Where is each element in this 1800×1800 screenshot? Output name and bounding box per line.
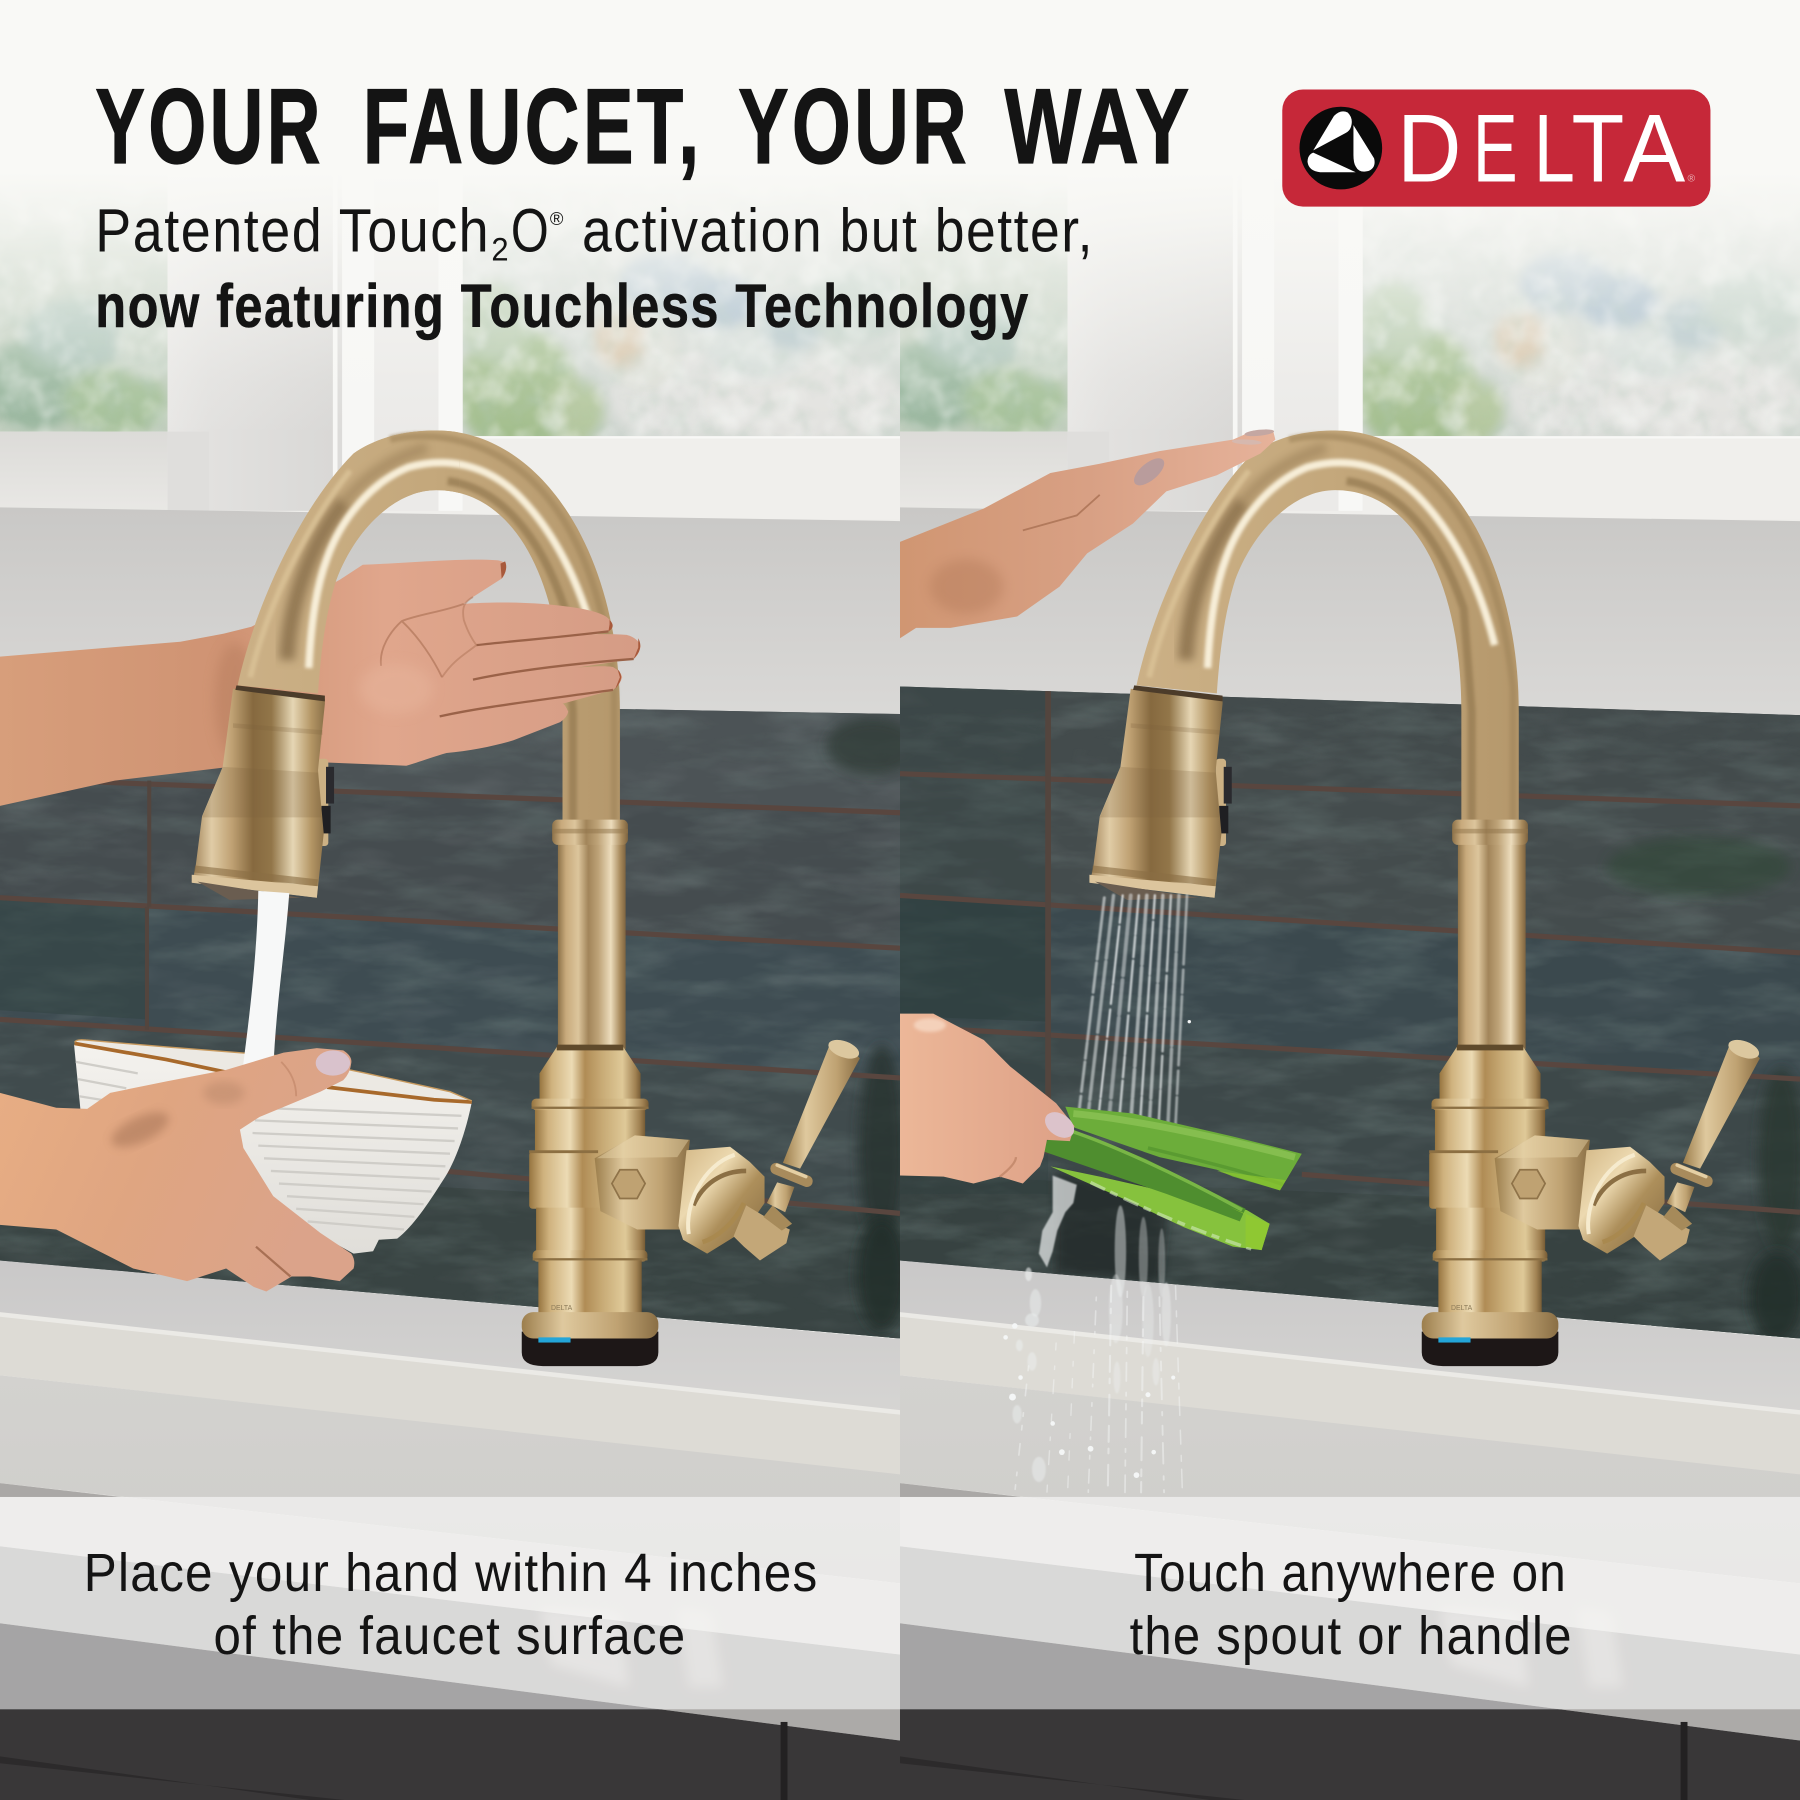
caption right: the spout or handle [1130,1606,1573,1666]
faucet right: DELTA [1451,1305,1473,1312]
subtitle line one: 2 [491,232,509,268]
logo: Delta: A [1623,95,1686,202]
subtitle line one: Patented Touch [95,196,490,264]
subtitle line one: O [511,196,549,264]
title: FAUCET, [363,66,703,186]
title: YOUR [95,66,324,186]
subtitle line one: activation but better, [582,196,1094,264]
tile backsplash left [0,689,918,1355]
faucet left: spout and stem: DELTA [551,1305,573,1312]
caption right: Touch anywhere on [1134,1543,1567,1603]
water spray right [1079,895,1187,1134]
logo: Delta: T [1572,95,1624,202]
background: kitchen room left panel [0,215,900,1800]
water stream left [242,891,289,1072]
hand holding vegetables [900,1014,1079,1184]
faucet left: spout and stem [238,430,862,1366]
title [95,66,1193,186]
caption left [84,1543,818,1666]
caption left: of the faucet surface [214,1606,686,1666]
logo: Delta: E [1473,95,1518,202]
subtitle line two: now featuring Touchless Technology [95,272,1030,340]
caption right [1130,1543,1573,1666]
subtitle line one: ® [550,208,564,229]
title: YOUR [738,66,970,186]
background: kitchen room right panel [900,215,1800,1800]
caption band right [900,1497,1800,1709]
hand touching spout [900,428,1275,638]
logo: Delta [1282,90,1710,207]
subtitle line one [95,196,1094,268]
caption band left [0,1497,900,1709]
hand holding bowl [0,1048,354,1291]
green vegetable stalks [1040,1107,1302,1250]
arm and hand left, hovering near faucet [0,560,641,806]
faucet left: spout overlap and spray head [192,430,460,900]
caption left: Place your hand within 4 inches [84,1543,818,1603]
logo: Delta: ® [1688,173,1696,184]
tile backsplash right [900,677,1800,1355]
bowl [74,1040,472,1254]
logo: Delta: D [1397,95,1461,202]
logo: Delta: L [1534,95,1575,202]
faucet right [1089,430,1762,1366]
splash and droplets [1003,1020,1191,1492]
title: WAY [1004,66,1193,186]
